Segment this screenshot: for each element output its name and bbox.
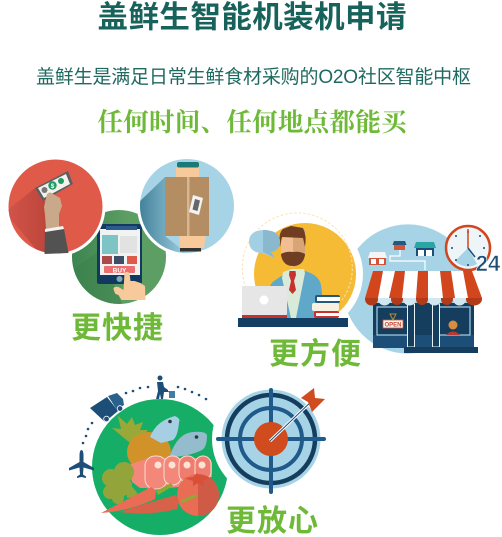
icon: fresh food circle [92, 380, 330, 535]
icon: parcel circle [138, 159, 234, 256]
title: 盖鲜生智能机装机申请 [98, 0, 406, 34]
subtitle: 盖鲜生是满足日常生鲜食材采购的O2O社区智能中枢 [36, 66, 471, 88]
icon: phone buy circle: BUY [113, 268, 127, 274]
tagline: 任何时间、任何地点都能买 [98, 108, 409, 137]
clock [446, 226, 501, 276]
label: faster: 更快捷 [71, 312, 163, 345]
shop building [373, 303, 478, 353]
group: more convenient [238, 213, 501, 371]
shop building: OPEN [384, 322, 402, 328]
icon: cash in hand circle [5, 160, 102, 254]
label: more convenient: 更方便 [269, 338, 361, 371]
icon: delivery route [69, 376, 207, 478]
airplane [69, 450, 94, 478]
truck [90, 397, 118, 422]
icon: phone buy circle [72, 210, 166, 304]
icon: shop circle [247, 216, 501, 354]
group: more reassuring [69, 376, 330, 537]
group: faster [5, 156, 237, 345]
small shops and arrows [368, 241, 436, 270]
icon: cash in hand circle: $ [51, 183, 55, 190]
shopper [158, 376, 162, 380]
clock: 24 [476, 251, 501, 276]
icon: businessman circle [238, 213, 356, 327]
icon: target [218, 388, 325, 492]
awning [365, 271, 482, 306]
